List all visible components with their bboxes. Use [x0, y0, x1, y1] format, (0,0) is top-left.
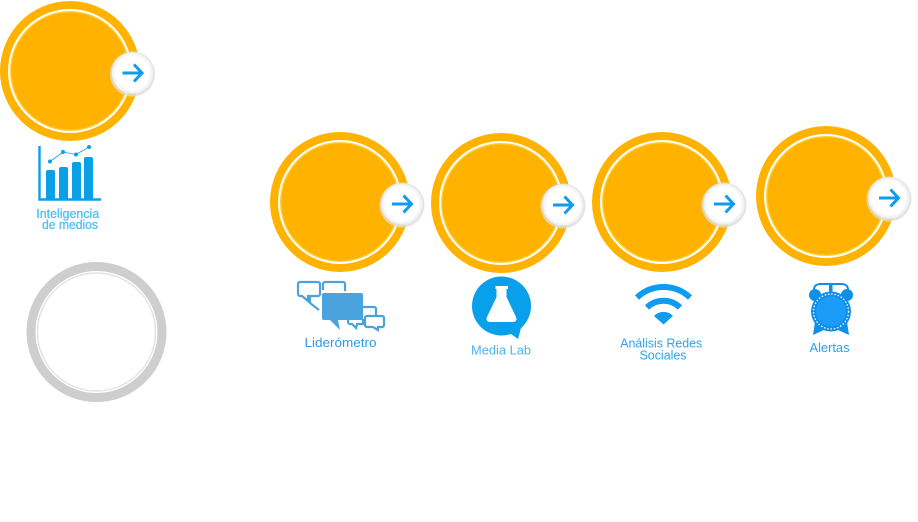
circle: Media Lab	[431, 133, 586, 273]
arrow button: Inteligencia de medios	[110, 52, 155, 96]
label: Media Lab: Media Lab	[471, 344, 531, 358]
icon: speech bubbles	[298, 282, 384, 330]
label: Inteligencia de medios: de medios	[42, 218, 98, 232]
icon: alarm clock	[809, 284, 853, 335]
icon: wifi	[637, 287, 690, 324]
label: Análisis Redes Sociales: Análisis Redes	[620, 336, 702, 350]
circle: Inteligencia de medios	[0, 1, 155, 141]
circle: Liderómetro	[270, 132, 424, 272]
label: Análisis Redes Sociales: Sociales	[640, 348, 686, 362]
arrow button: Análisis Redes Sociales	[702, 182, 746, 228]
arrow button: Media Lab	[540, 184, 586, 228]
circle: Alertas	[756, 126, 912, 266]
label: Inteligencia de medios: Inteligencia	[36, 207, 99, 221]
label: Alertas: Alertas	[810, 341, 850, 355]
circle: Análisis Redes Sociales	[592, 132, 746, 272]
arrow button: Liderómetro	[380, 182, 424, 228]
arrow button: Alertas	[866, 176, 912, 222]
label: Liderómetro: Liderómetro	[304, 336, 377, 350]
circle: grey inactive	[31, 266, 162, 398]
icon: bar chart with trend line	[40, 145, 101, 200]
icon: Media Lab flask bubble	[472, 276, 531, 339]
